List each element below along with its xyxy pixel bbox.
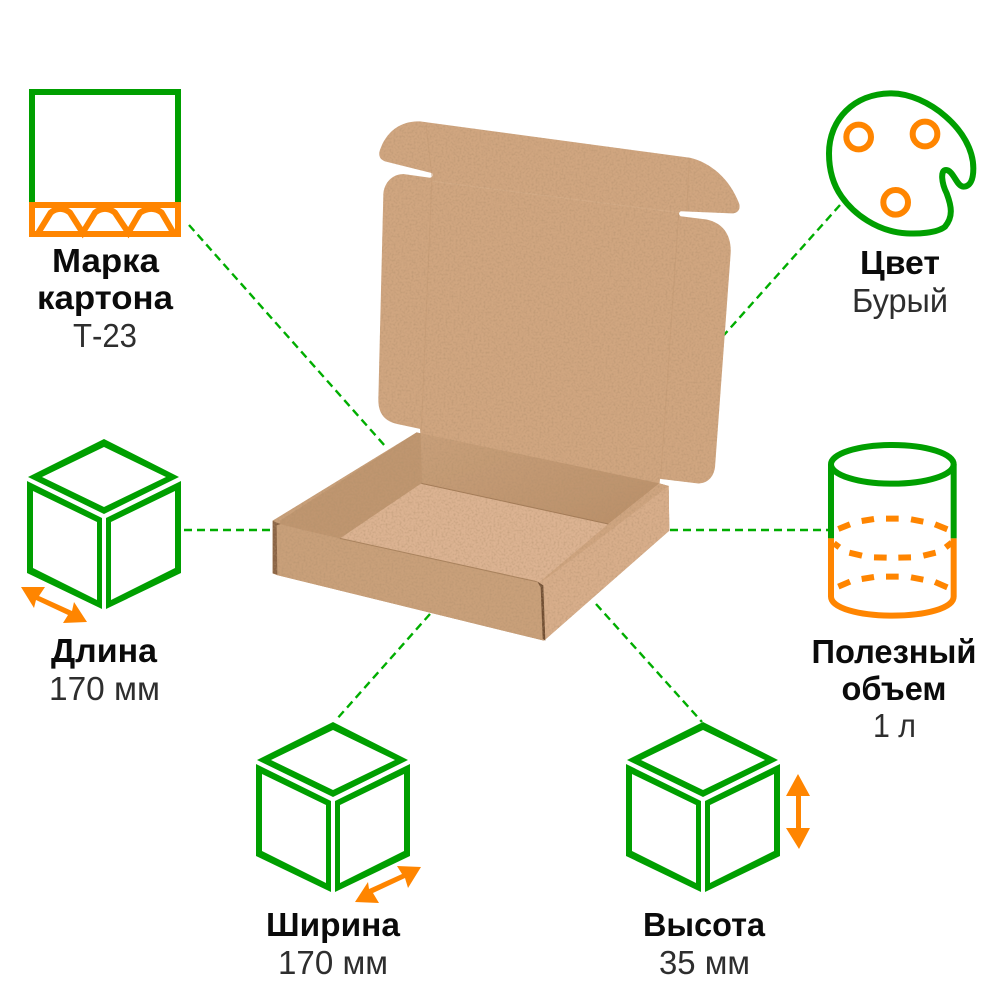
label: height: Высота bbox=[643, 906, 766, 943]
label: height bbox=[643, 906, 766, 981]
box base bbox=[273, 432, 669, 641]
base silhouette bbox=[273, 432, 669, 641]
icon: corrugated cardboard bbox=[32, 92, 178, 234]
box floor bbox=[340, 483, 608, 584]
label: colour: Бурый bbox=[852, 282, 948, 319]
label: width bbox=[266, 906, 401, 981]
label: useful volume bbox=[812, 633, 976, 744]
left edge seam bbox=[273, 521, 281, 575]
label: width: 170 мм bbox=[278, 944, 388, 981]
label: carton grade: Т-23 bbox=[73, 317, 137, 354]
icon: cube width bbox=[256, 722, 421, 903]
icon: cylinder useful volume bbox=[831, 445, 954, 616]
arrow: height bbox=[786, 774, 810, 849]
label: length: Длина bbox=[51, 632, 158, 669]
front outer wall bbox=[277, 524, 544, 641]
label: carton grade: Марка bbox=[52, 242, 160, 279]
label: useful volume: объем bbox=[842, 670, 946, 707]
box lid bbox=[378, 121, 740, 487]
label: length: 170 мм bbox=[49, 670, 160, 707]
back inner wall bbox=[421, 433, 659, 524]
right outer wall bbox=[540, 483, 669, 641]
arrow: width bbox=[355, 866, 421, 903]
cardboard box photo bbox=[273, 121, 740, 641]
label: carton grade bbox=[37, 242, 174, 354]
left inner wall bbox=[280, 432, 422, 539]
label: colour bbox=[852, 244, 948, 319]
label: height: 35 мм bbox=[659, 944, 750, 981]
icon: cube length bbox=[21, 439, 181, 623]
label: carton grade: картона bbox=[37, 279, 174, 316]
connector lines bbox=[184, 205, 840, 722]
label: useful volume: Полезный bbox=[812, 633, 976, 670]
label: length bbox=[49, 632, 160, 707]
icon: colour palette bbox=[829, 93, 973, 234]
arrow: length bbox=[21, 587, 87, 623]
corner seam bbox=[537, 582, 545, 641]
icon: cube height bbox=[626, 722, 810, 892]
label: colour: Цвет bbox=[860, 244, 940, 281]
label: useful volume: 1 л bbox=[873, 707, 916, 744]
label: width: Ширина bbox=[266, 906, 401, 943]
